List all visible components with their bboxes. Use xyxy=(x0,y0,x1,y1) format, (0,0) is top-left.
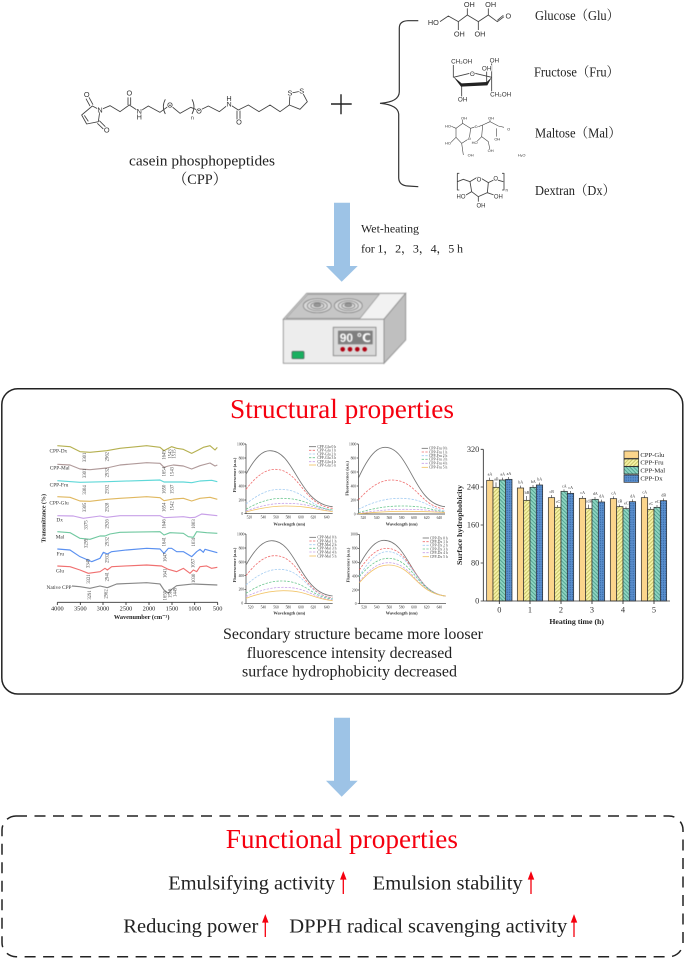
subchart: CPP-Glu fluorescence: CPP-Glu 1 h xyxy=(317,449,336,453)
bars: heating time 5 h xyxy=(641,489,667,601)
chart: FTIR spectra: 3299 xyxy=(84,538,89,548)
chart: FTIR spectra: CPP-Glu xyxy=(49,500,69,506)
legend: sugar conjugates: CPP-Fru xyxy=(640,460,664,467)
chart: surface hydrophobicity bars: 2 xyxy=(559,606,563,615)
chart: FTIR spectra: 2932 xyxy=(105,467,110,477)
subchart: CPP-Dx fluorescence: 600 xyxy=(352,561,358,565)
icon: up arrow emulsifying activity xyxy=(341,873,346,894)
subchart: CPP-Fru fluorescence: CPP-Fru 1 h xyxy=(429,450,447,454)
subchart: CPP-Dx fluorescence: 620 xyxy=(424,606,430,610)
structure: glucose: O xyxy=(505,11,511,20)
text: wet-heating conditions: for 1，2，3，4，5 h xyxy=(361,242,463,256)
chart: FTIR spectra: 2962 xyxy=(105,589,110,599)
legend: sugar conjugates: CPP-Glu xyxy=(640,452,665,459)
subchart: CPP-Dx fluorescence: 0 xyxy=(355,602,357,606)
subchart: CPP-Fru fluorescence: 200 xyxy=(351,498,356,502)
subchart: CPP-Fru fluorescence: CPP-Fru 3 h xyxy=(429,458,447,462)
chart: FTIR spectra: Fru xyxy=(57,551,64,557)
arrow: wet-heating xyxy=(326,203,358,282)
chart: FTIR spectra: 1000 xyxy=(188,606,201,613)
subchart: CPP-Dx fluorescence: Fluorescence (a.u.) xyxy=(345,547,350,582)
structure: maltose: O xyxy=(474,124,478,129)
subchart: CPP-Glu fluorescence: 600 xyxy=(298,516,304,520)
subchart: CPP-Fru fluorescence: 600 xyxy=(411,516,417,520)
subchart: CPP-Dx fluorescence: CPP-Dx 2 h xyxy=(430,544,448,548)
molecule: casein phosphopeptides linker: N xyxy=(137,107,142,116)
chart: FTIR spectra: 1650 xyxy=(163,484,168,494)
chart: FTIR spectra: 1647 xyxy=(164,552,169,562)
structure: maltose: OH xyxy=(494,137,500,142)
subchart: CPP-Fru fluorescence: 400 xyxy=(351,484,356,488)
chart: FTIR spectra: 3500 xyxy=(74,606,87,613)
subchart: CPP-Fru fluorescence: CPP-Fru 5 h xyxy=(429,466,447,470)
chart: FTIR spectra: 1543 xyxy=(169,449,174,459)
subchart: CPP-Mal fluorescence: 200 xyxy=(239,588,244,592)
subchart: CPP-Mal fluorescence: 800 xyxy=(239,546,244,550)
subchart: CPP-Glu fluorescence: CPP-Glu 3 h xyxy=(317,456,336,460)
molecule: casein phosphopeptides linker: O xyxy=(104,125,110,134)
text: wet-heating conditions: Wet-heating xyxy=(361,222,419,236)
text: structural findings: surface hydrophobicity decreased xyxy=(242,664,457,680)
bars: heating time 1 h: bA xyxy=(531,479,536,484)
subchart: CPP-Fru fluorescence: 0 xyxy=(354,512,356,516)
text: structural findings: fluorescence intensity decreased xyxy=(247,645,452,662)
curly brace xyxy=(380,21,418,187)
label: maltose: Maltose（Mal） xyxy=(535,126,621,141)
arrow: to functional properties xyxy=(326,718,358,797)
chart: FTIR spectra: 4000 xyxy=(51,606,64,613)
chart: FTIR spectra: 1031 xyxy=(192,536,197,546)
subchart: CPP-Glu fluorescence: 540 xyxy=(261,516,266,520)
subchart: CPP-Glu fluorescence: CPP-Glu 0 h xyxy=(317,445,336,449)
molecule: casein phosphopeptides linker: O xyxy=(196,106,202,115)
structure: fructose: CH₂OH xyxy=(490,92,512,99)
subchart: CPP-Mal fluorescence: 620 xyxy=(311,605,316,609)
caption: casein phosphopeptides xyxy=(129,154,275,188)
chart: FTIR spectra: 2000 xyxy=(143,606,155,613)
bars: heating time 1 h: bA xyxy=(518,480,523,485)
chart: FTIR spectra: Transmittance (%) xyxy=(40,494,47,543)
subchart: CPP-Mal fluorescence: 0 xyxy=(241,602,243,606)
subchart: CPP-Dx fluorescence: 520 xyxy=(361,606,367,610)
subchart: CPP-Mal fluorescence: 560 xyxy=(273,605,279,609)
structure: dextran: O xyxy=(493,177,498,183)
chart: FTIR spectra: CPP-Mal xyxy=(50,466,70,472)
structure: dextran: OH xyxy=(477,203,485,209)
molecule: casein phosphopeptides linker: O xyxy=(236,118,242,127)
subchart: CPP-Fru fluorescence: CPP-Fru 0 h xyxy=(429,447,447,451)
subchart: CPP-Dx fluorescence: CPP-Dx 0 h xyxy=(430,536,448,540)
chart: FTIR spectra: 1057 xyxy=(191,558,196,568)
chart: FTIR spectra: 3301 xyxy=(83,452,88,462)
molecule: casein phosphopeptides linker: N xyxy=(226,100,232,109)
bars: heating time 3 h: dA xyxy=(593,491,598,496)
subchart: CPP-Dx fluorescence: 640 xyxy=(437,606,442,610)
chart: FTIR spectra: 1649 xyxy=(163,450,168,460)
subchart: CPP-Dx fluorescence: 600 xyxy=(411,606,417,610)
subchart: CPP-Glu fluorescence: 600 xyxy=(239,470,244,474)
structure: dextran xyxy=(457,173,508,209)
label: fructose: Fructose（Fru） xyxy=(534,65,619,80)
subchart: CPP-Glu fluorescence: CPP-Glu 5 h xyxy=(317,463,336,467)
bars: heating time 3 h xyxy=(579,490,605,601)
subchart: CPP-Dx fluorescence: 800 xyxy=(352,547,358,551)
chart: FTIR spectra: 1543 xyxy=(170,466,175,476)
subchart: CPP-Dx fluorescence: CPP-Dx 5 h xyxy=(430,555,448,559)
icon: up arrow reducing power xyxy=(263,916,268,937)
chart: surface hydrophobicity bars: 3 xyxy=(590,606,594,615)
chart: surface hydrophobicity bars: 160 xyxy=(467,521,479,530)
chart: FTIR spectra: Dx xyxy=(56,517,63,523)
subchart: CPP-Glu fluorescence: Wavelength (nm) xyxy=(273,522,306,527)
text: emulsifying activity: Emulsifying activity xyxy=(168,872,336,894)
molecule: casein phosphopeptides linker: H xyxy=(226,94,232,103)
label: dextran: Dextran（Dx） xyxy=(535,183,615,198)
caption: casein phosphopeptides: （CPP） xyxy=(173,171,227,188)
subchart: CPP-Glu fluorescence: CPP-Glu 2 h xyxy=(317,452,336,456)
chart: FTIR spectra: 1542 xyxy=(170,501,175,511)
subchart: CPP-Mal fluorescence: CPP-Mal 3 h xyxy=(317,547,337,551)
subchart: CPP-Fru fluorescence xyxy=(344,442,447,527)
molecule: casein phosphopeptides linker: n xyxy=(191,115,194,121)
bars: heating time 0 h: aA xyxy=(500,472,505,477)
subchart: CPP-Fru fluorescence: Fluorescence (a.u.) xyxy=(344,460,349,496)
molecule: casein phosphopeptides linker: N xyxy=(97,105,103,114)
chart: surface hydrophobicity bars xyxy=(455,445,670,626)
chart: fluorescence spectra xyxy=(232,442,448,616)
bars: heating time 5 h: cC xyxy=(649,501,654,506)
subchart: CPP-Fru fluorescence: 620 xyxy=(424,516,430,520)
chart: FTIR spectra: 3000 xyxy=(97,606,109,613)
heading: structural properties: Structural properties xyxy=(230,393,454,424)
chart: FTIR spectra: 2928 xyxy=(105,502,110,512)
subchart: CPP-Glu fluorescence: 520 xyxy=(247,516,252,520)
text: structural findings: Secondary structure became more looser xyxy=(223,626,484,643)
subchart: CPP-Mal fluorescence: CPP-Mal 0 h xyxy=(317,536,337,540)
chart: FTIR spectra xyxy=(40,446,222,621)
subchart: CPP-Glu fluorescence xyxy=(232,442,336,527)
chart: FTIR spectra: Glu xyxy=(56,569,64,575)
chart: surface hydrophobicity bars: 240 xyxy=(467,483,479,492)
bars: heating time 3 h: cA xyxy=(580,490,585,495)
chart: surface hydrophobicity bars: Heating time (h) xyxy=(549,617,604,626)
chart: FTIR spectra: CPP-Dx xyxy=(49,448,68,454)
subchart: CPP-Fru fluorescence: Wavelength (nm) xyxy=(386,522,418,527)
bars: heating time 2 h: cB xyxy=(549,489,554,494)
structure: glucose: OH xyxy=(474,30,485,39)
chart: FTIR spectra: 3291 xyxy=(88,590,93,600)
subchart: CPP-Mal fluorescence: 580 xyxy=(286,605,291,609)
subchart: CPP-Dx fluorescence: CPP-Dx 4 h xyxy=(430,551,448,555)
structure: glucose: OH xyxy=(485,0,496,9)
molecule: casein phosphopeptides linker: S xyxy=(299,86,304,95)
structure: fructose xyxy=(451,58,512,104)
bars: heating time 0 h: aA xyxy=(507,471,511,476)
subchart: CPP-Fru fluorescence: 580 xyxy=(399,516,405,520)
structure: glucose: HO xyxy=(428,18,439,27)
bars: heating time 2 h: cC xyxy=(556,499,561,504)
subchart: CPP-Glu fluorescence: 640 xyxy=(324,516,330,520)
legend: sugar conjugates xyxy=(624,451,665,483)
structure: maltose: O xyxy=(468,136,471,141)
structure: maltose: OH xyxy=(488,115,494,120)
subchart: CPP-Glu fluorescence: Fluorescence (a.u.) xyxy=(232,457,237,492)
structure: glucose: OH xyxy=(464,0,475,9)
subchart: CPP-Glu fluorescence: 800 xyxy=(239,456,244,460)
subchart: CPP-Glu fluorescence: 0 xyxy=(241,512,243,516)
subchart: CPP-Dx fluorescence: 560 xyxy=(387,606,392,610)
chart: surface hydrophobicity bars: 4 xyxy=(621,606,626,615)
subchart: CPP-Dx fluorescence: 1000 xyxy=(350,533,358,537)
subchart: CPP-Dx fluorescence xyxy=(345,533,448,616)
chart: FTIR spectra: 1646 xyxy=(163,519,168,529)
chart: FTIR spectra: 2500 xyxy=(120,606,132,613)
text: structural findings xyxy=(223,626,484,680)
bars: heating time 4 h: dA xyxy=(630,493,635,498)
chart: FTIR spectra: 3349 xyxy=(86,558,91,568)
structure: dextran: OH xyxy=(494,194,503,200)
molecule: casein phosphopeptides linker: S xyxy=(288,89,293,98)
bars: heating time 0 h xyxy=(487,471,512,601)
structure: fructose: CH₂OH xyxy=(451,58,473,65)
chart: surface hydrophobicity bars: Surface hydrophobicity xyxy=(455,485,464,565)
bars: heating time 5 h: cA xyxy=(642,489,647,494)
legend: sugar conjugates: CPP-Mal xyxy=(640,467,665,474)
subchart: CPP-Mal fluorescence: 600 xyxy=(298,605,304,609)
structure: maltose: OH xyxy=(461,115,467,120)
bars: heating time 5 h: dB xyxy=(661,492,666,497)
chart: FTIR spectra: 1515 xyxy=(173,449,178,459)
chart: surface hydrophobicity bars: 1 xyxy=(528,606,532,615)
bars: heating time 2 h xyxy=(548,483,574,601)
bars: heating time 3 h: cdB xyxy=(586,499,593,504)
subchart: CPP-Mal fluorescence: 1000 xyxy=(237,532,244,536)
structure: maltose xyxy=(445,115,525,158)
chart: FTIR spectra: 2941 xyxy=(105,571,110,581)
subchart: CPP-Mal fluorescence: 400 xyxy=(239,574,244,578)
text: DPPH radical scavenging activity: DPPH radical scavenging activity xyxy=(289,915,568,937)
subchart: CPP-Mal fluorescence: Fluorescence (a.u.) xyxy=(232,547,237,582)
structure: maltose: O xyxy=(507,127,510,132)
subchart: CPP-Mal fluorescence: CPP-Mal 1 h xyxy=(317,539,337,543)
subchart: CPP-Mal fluorescence: 640 xyxy=(324,605,330,609)
subchart: CPP-Mal fluorescence xyxy=(232,532,337,616)
chart: surface hydrophobicity bars: 0 xyxy=(475,597,479,606)
chart: FTIR spectra: 2926 xyxy=(105,519,110,529)
bars: heating time 2 h: cA xyxy=(568,485,573,490)
structure: maltose: HO xyxy=(472,140,478,145)
bars: heating time 4 h: cA xyxy=(611,490,616,495)
chart: FTIR spectra: 2932 xyxy=(105,536,110,546)
chart: FTIR spectra: 3375 xyxy=(84,520,89,530)
subchart: CPP-Fru fluorescence: 640 xyxy=(437,516,442,520)
panel: structural properties xyxy=(2,389,683,694)
subchart: CPP-Glu fluorescence: 560 xyxy=(273,516,279,520)
chart: FTIR spectra: 2932 xyxy=(105,553,110,563)
subchart: CPP-Glu fluorescence: 400 xyxy=(239,484,244,488)
chart: FTIR spectra: 1641 xyxy=(163,536,168,546)
subchart: CPP-Mal fluorescence: 540 xyxy=(261,605,266,609)
structure: maltose: HO xyxy=(445,140,451,145)
subchart: CPP-Mal fluorescence: CPP-Mal 5 h xyxy=(317,554,337,558)
icon: water bath heater xyxy=(283,293,406,363)
chart: FTIR spectra: 1516 xyxy=(169,588,174,598)
icon: up arrow DPPH activity xyxy=(572,916,576,937)
structure: fructose: OH xyxy=(482,66,492,73)
molecule: casein phosphopeptides linker: O xyxy=(167,100,173,109)
subchart: CPP-Fru fluorescence: 1000 xyxy=(349,442,356,446)
subchart: CPP-Dx fluorescence: Wavelength (nm) xyxy=(386,611,418,616)
subchart: CPP-Dx fluorescence: CPP-Dx 1 h xyxy=(430,540,448,544)
chart: FTIR spectra: 3305 xyxy=(83,502,88,512)
chart: FTIR spectra: 1641 xyxy=(164,568,169,578)
structure: maltose: H₂O xyxy=(518,153,525,158)
structure: glucose: OH xyxy=(454,30,465,39)
structure: dextran: O xyxy=(477,177,482,183)
chart: FTIR spectra: 1449 xyxy=(174,587,179,597)
structure: fructose: OH xyxy=(490,58,500,65)
structure: fructose: OH xyxy=(458,97,468,104)
chart: FTIR spectra: 3304 xyxy=(83,485,88,495)
chart: FTIR spectra: 1030 xyxy=(192,573,197,583)
molecule: casein phosphopeptides linker xyxy=(82,86,307,134)
subchart: CPP-Glu fluorescence: 1000 xyxy=(237,442,244,446)
subchart: CPP-Mal fluorescence: CPP-Mal 2 h xyxy=(317,543,337,547)
icon: up arrow emulsion stability xyxy=(529,873,533,894)
bars: heating time 1 h xyxy=(517,477,543,601)
bars: heating time 4 h: eC xyxy=(624,501,629,506)
structure: maltose: HO xyxy=(445,124,451,129)
chart: FTIR spectra: 1650 xyxy=(164,590,169,600)
chart: FTIR spectra: 1003 xyxy=(192,519,197,529)
bars: heating time 0 h: aB xyxy=(494,476,499,481)
chart: FTIR spectra: CPP-Fru xyxy=(50,482,69,488)
subchart: CPP-Dx fluorescence: 540 xyxy=(374,606,380,610)
legend: sugar conjugates: CPP-Dx xyxy=(640,476,663,483)
chart: surface hydrophobicity bars: 320 xyxy=(467,445,479,454)
subchart: CPP-Dx fluorescence: CPP-Dx 3 h xyxy=(430,547,448,551)
structure: fructose: O xyxy=(470,71,475,78)
subchart: CPP-Dx fluorescence: 200 xyxy=(352,588,358,592)
chart: FTIR spectra: 1537 xyxy=(170,484,175,494)
subchart: CPP-Fru fluorescence: 540 xyxy=(374,516,380,520)
molecule: casein phosphopeptides linker: O xyxy=(126,89,132,98)
chart: FTIR spectra: 2932 xyxy=(105,484,110,494)
bars: heating time 5 h: eC xyxy=(655,499,660,504)
icon: water bath heater: 90 ℃ xyxy=(340,331,371,345)
bars: heating time 4 h: cB xyxy=(618,499,623,504)
chart: FTIR spectra: 500 xyxy=(213,606,222,613)
subchart: CPP-Mal fluorescence: 600 xyxy=(239,560,244,564)
bars: heating time 2 h: cA xyxy=(562,483,567,488)
chart: surface hydrophobicity bars: 5 xyxy=(652,606,656,615)
molecule: casein phosphopeptides linker: H xyxy=(137,112,142,121)
subchart: CPP-Fru fluorescence: 520 xyxy=(361,516,366,520)
subchart: CPP-Glu fluorescence: 580 xyxy=(286,516,291,520)
chart: FTIR spectra: 1500 xyxy=(166,606,178,613)
bars: heating time 0 h: aA xyxy=(488,472,492,477)
subchart: CPP-Dx fluorescence: 580 xyxy=(399,606,405,610)
subchart: CPP-Glu fluorescence: 620 xyxy=(311,516,316,520)
caption: casein phosphopeptides: casein phosphopeptides xyxy=(129,154,275,170)
structure: dextran: n xyxy=(505,187,508,192)
chart: FTIR spectra: 3301 xyxy=(83,468,88,478)
bars: heating time 4 h xyxy=(610,490,636,601)
subchart: CPP-Glu fluorescence: 200 xyxy=(239,498,244,502)
label: glucose: Glucose（Glu） xyxy=(535,8,619,23)
subchart: CPP-Fru fluorescence: CPP-Fru 4 h xyxy=(429,462,447,466)
chart: FTIR spectra: 2962 xyxy=(105,451,110,461)
chart: FTIR spectra: 1654 xyxy=(163,502,168,512)
subchart: CPP-Fru fluorescence: 800 xyxy=(351,456,356,460)
bars: heating time 3 h: dA xyxy=(599,494,604,499)
structure: maltose: OH xyxy=(488,148,494,153)
panel: functional properties xyxy=(2,816,683,957)
bars: heating time 1 h: bB xyxy=(525,490,530,495)
plus sign xyxy=(331,94,352,114)
chart: surface hydrophobicity bars: 0 xyxy=(497,606,501,615)
heading: functional properties: Functional properties xyxy=(226,823,458,854)
text: emulsion stability: Emulsion stability xyxy=(373,872,524,894)
chart: FTIR spectra: 3321 xyxy=(87,574,92,584)
chart: FTIR spectra: 1654 xyxy=(163,466,168,476)
subchart: CPP-Glu fluorescence: CPP-Glu 4 h xyxy=(317,460,336,464)
molecule: casein phosphopeptides linker: O xyxy=(84,90,90,99)
structure: maltose: OH xyxy=(468,153,474,158)
subchart: CPP-Mal fluorescence: CPP-Mal 4 h xyxy=(317,550,337,554)
subchart: CPP-Fru fluorescence: 560 xyxy=(387,516,392,520)
chart: FTIR spectra: Mal xyxy=(56,534,65,540)
structure: glucose xyxy=(428,0,511,39)
bars: heating time 1 h: bA xyxy=(537,477,542,482)
subchart: CPP-Fru fluorescence: 600 xyxy=(351,470,356,474)
chart: FTIR spectra: Native CPP xyxy=(46,585,72,591)
text: wet-heating conditions xyxy=(361,222,463,256)
text: reducing power: Reducing power xyxy=(123,915,259,937)
subchart: CPP-Mal fluorescence: Wavelength (nm) xyxy=(273,611,306,616)
subchart: CPP-Mal fluorescence: 520 xyxy=(248,605,254,609)
subchart: CPP-Fru fluorescence: CPP-Fru 2 h xyxy=(429,454,447,458)
structure: dextran: HO xyxy=(457,194,466,200)
chart: surface hydrophobicity bars: 80 xyxy=(471,559,479,568)
subchart: CPP-Dx fluorescence: 400 xyxy=(352,574,358,578)
chart: FTIR spectra: Wavenumber (cm⁻¹) xyxy=(114,614,169,621)
